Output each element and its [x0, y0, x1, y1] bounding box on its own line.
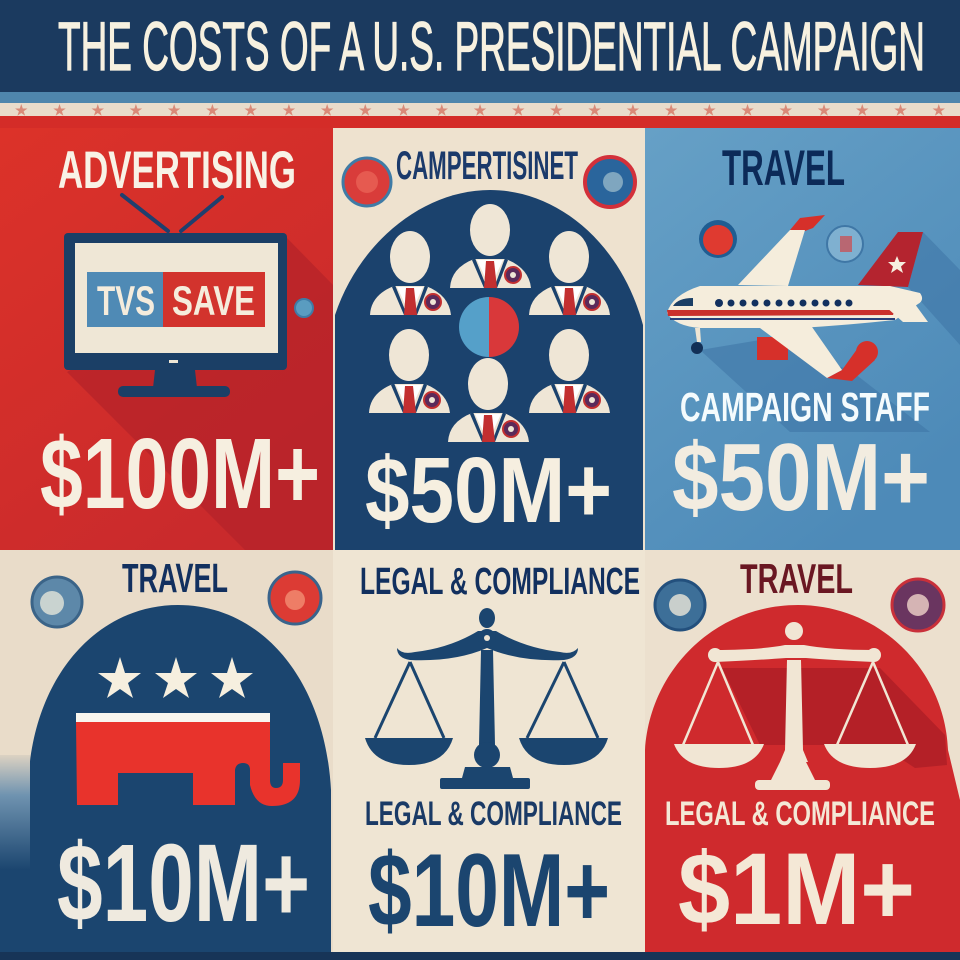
heading: TRAVEL [740, 555, 853, 602]
heading: CAMPERTISINET [396, 144, 578, 188]
dome [645, 605, 960, 960]
panel: red legal and compliance [645, 550, 960, 960]
icon: television: TVS [97, 277, 155, 324]
staff figure 2 [370, 231, 451, 315]
arch [335, 190, 643, 550]
panel: campaign staff [333, 128, 645, 550]
panel: travel party emblem [0, 550, 333, 960]
panel: legal and compliance [333, 550, 645, 960]
badge left [343, 158, 391, 206]
staff figure 5 [529, 329, 610, 413]
amount: $50M+ [672, 424, 930, 531]
icon: scales [365, 608, 608, 789]
heading: advertising: ADVERTISING [58, 141, 296, 200]
icon: elephant [76, 657, 300, 806]
panel: advertising [0, 128, 333, 550]
amount: $50M+ [365, 438, 612, 542]
heading: TRAVEL [122, 555, 228, 601]
badge left [655, 580, 705, 630]
badge right [585, 157, 635, 207]
icon: television: SAVE [172, 277, 255, 324]
staff figure 4 [369, 329, 450, 413]
amount: advertising: $100M+ [40, 418, 320, 530]
dome [0, 605, 331, 960]
amount: $10M+ [57, 822, 310, 945]
center emblem [459, 297, 519, 357]
icon: television [64, 195, 313, 397]
heading: LEGAL & COMPLIANCE [360, 561, 640, 603]
heading: TRAVEL [722, 140, 845, 196]
star strip: ★★★★★★★★★★★★★★★★★★★★★★★★★ [15, 102, 945, 118]
label: LEGAL & COMPLIANCE [365, 795, 622, 833]
panel: travel [645, 128, 960, 550]
staff figure 1 [450, 204, 531, 288]
badge right [892, 579, 944, 631]
bottom band [0, 952, 960, 960]
header banner [0, 0, 960, 128]
icon: scales [674, 622, 916, 790]
staff figure 6 [448, 358, 529, 442]
badge left [32, 577, 82, 627]
amount: $1M+ [678, 832, 915, 946]
icon: airplane [667, 215, 928, 381]
amount: $10M+ [368, 833, 610, 949]
badge right [269, 572, 321, 624]
staff figure 3 [529, 231, 610, 315]
